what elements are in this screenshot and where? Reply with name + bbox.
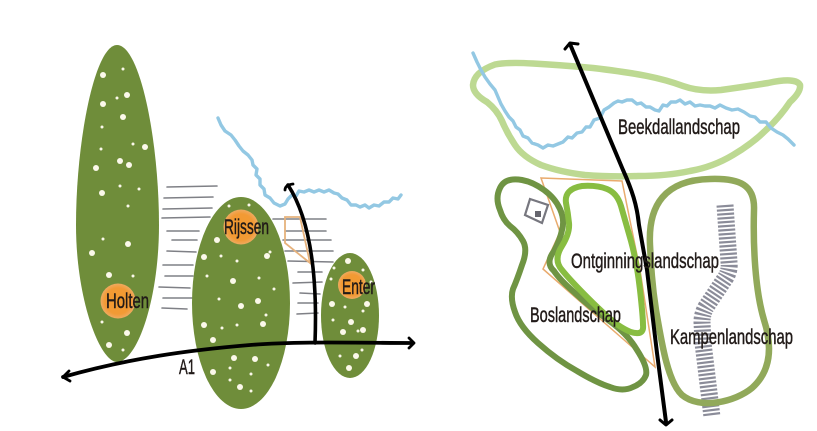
arrow: north road [285, 184, 316, 343]
icon: square marker [525, 199, 548, 223]
town: Enter [338, 271, 375, 299]
left map [63, 45, 414, 409]
town: Enter: Enter [342, 276, 375, 299]
label: Beekdallandschap: Beekdallandschap [618, 116, 740, 139]
orange plan outline [285, 217, 310, 263]
town: Holten [100, 284, 149, 318]
arrow: A1 motorway [63, 338, 414, 381]
outline: Kampenlandschap [650, 179, 769, 403]
hatched road strip [702, 205, 729, 417]
river [218, 118, 401, 208]
forest ellipse: Rijssen [192, 197, 290, 409]
river [473, 53, 794, 148]
right map [473, 43, 800, 425]
outline: Boslandschap [498, 179, 646, 390]
outline: Beekdallandschap [473, 63, 800, 176]
outline: Ontginningslandschap [558, 186, 643, 333]
forest ellipse: Holten [76, 45, 159, 362]
arrow: north-south road [565, 43, 672, 425]
town: Rijssen: Rijssen [224, 216, 269, 239]
town: Holten: Holten [106, 290, 149, 313]
grey field lines: right group [273, 219, 333, 314]
label: A1: A1 [179, 356, 195, 379]
label: Boslandschap: Boslandschap [530, 304, 621, 327]
orange plan outline [541, 178, 655, 367]
town: Rijssen [224, 210, 269, 244]
forest ellipse: Enter [321, 253, 379, 378]
grey field lines: left group [159, 186, 217, 309]
label: Ontginningslandschap: Ontginningslandschap [571, 250, 719, 273]
